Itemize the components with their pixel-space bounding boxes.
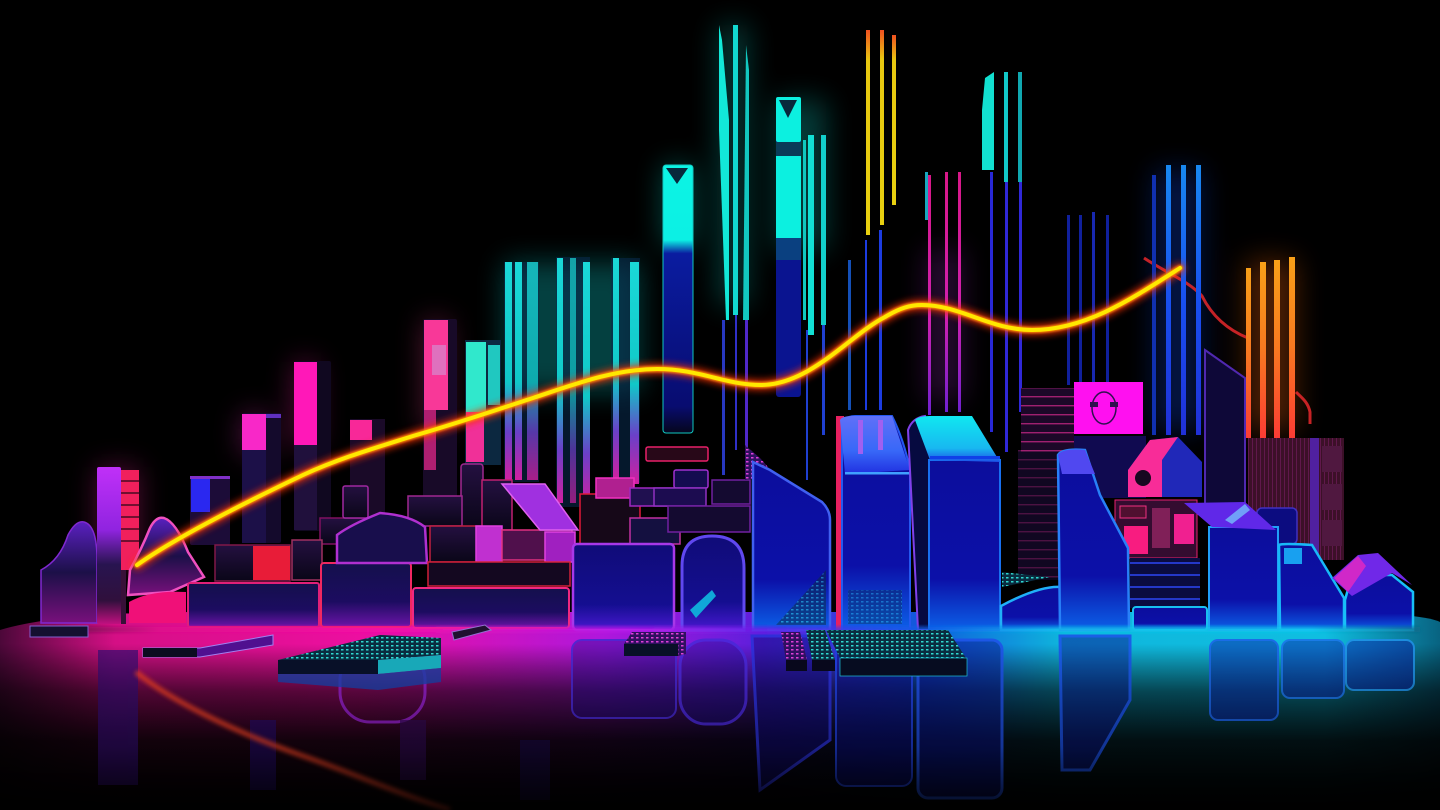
reflection of the blocks	[98, 636, 1414, 800]
tower: pink 4	[350, 419, 385, 519]
angled pink block	[502, 484, 578, 530]
tower: right cyan blue	[982, 72, 1022, 452]
reflection fade	[0, 650, 1440, 810]
tall towers	[504, 25, 1295, 507]
tower: magenta stripes	[925, 172, 961, 415]
tower: left cyan group	[504, 257, 640, 507]
tower: pink 3	[294, 361, 331, 531]
slab 2	[143, 635, 273, 657]
large blue front blocks	[745, 416, 1413, 630]
small floor slabs	[30, 625, 967, 690]
pink machinery	[1115, 500, 1197, 558]
tower: blue small	[190, 476, 230, 545]
hump right	[128, 518, 204, 595]
block: tall blue 1	[836, 416, 910, 630]
mid stepped blocks	[215, 447, 750, 581]
dome structure	[1128, 437, 1202, 497]
block: far right	[1332, 553, 1413, 630]
slab 5	[624, 632, 686, 656]
block: small round	[1001, 572, 1082, 630]
tower: tallest cyan stripes	[718, 25, 749, 475]
hump left	[41, 522, 97, 623]
tower: centre cyan block	[663, 165, 693, 433]
trend line	[137, 268, 1180, 565]
reflected yellow line	[136, 672, 450, 810]
tower: teal pink	[465, 340, 501, 465]
block: low flat	[1133, 607, 1207, 630]
tower: orange stripes	[1246, 257, 1295, 438]
floor light line	[50, 627, 1420, 632]
low front blocks left	[41, 467, 744, 630]
striped building	[1018, 388, 1074, 580]
right pink lattice building	[1248, 438, 1344, 560]
block: slanted right	[1058, 450, 1129, 630]
tower: pink light	[423, 319, 457, 499]
slab 4	[452, 625, 491, 640]
dark panel below screen	[1074, 436, 1146, 498]
slab 3	[278, 635, 441, 690]
tower: centre right cyan	[776, 97, 826, 480]
block: angled	[1279, 544, 1344, 630]
dark block behind right	[1257, 508, 1297, 544]
tower: pink 2	[242, 413, 281, 543]
pink towers on left	[97, 319, 501, 567]
floor reflection surface	[0, 612, 1440, 810]
hot pink block	[129, 592, 186, 623]
tower: dim blue	[1067, 212, 1109, 385]
pillar	[97, 467, 139, 624]
blue stripe machinery	[1130, 558, 1200, 608]
block: right main	[1184, 502, 1278, 630]
tower: yellow orange stripes	[848, 30, 896, 410]
magenta screen with face	[1074, 382, 1143, 434]
soft glow of towers	[504, 25, 1296, 430]
long low blocks	[188, 583, 319, 627]
slab 6	[781, 630, 967, 676]
red tail of trend line	[1144, 258, 1310, 424]
block: tall blue 2	[908, 416, 1000, 630]
slab 1	[30, 626, 88, 637]
tower: bright blue stripes	[1152, 165, 1201, 435]
tall right dark building	[1205, 350, 1245, 505]
block: slanted	[745, 445, 830, 630]
glow of pink towers	[97, 320, 448, 567]
